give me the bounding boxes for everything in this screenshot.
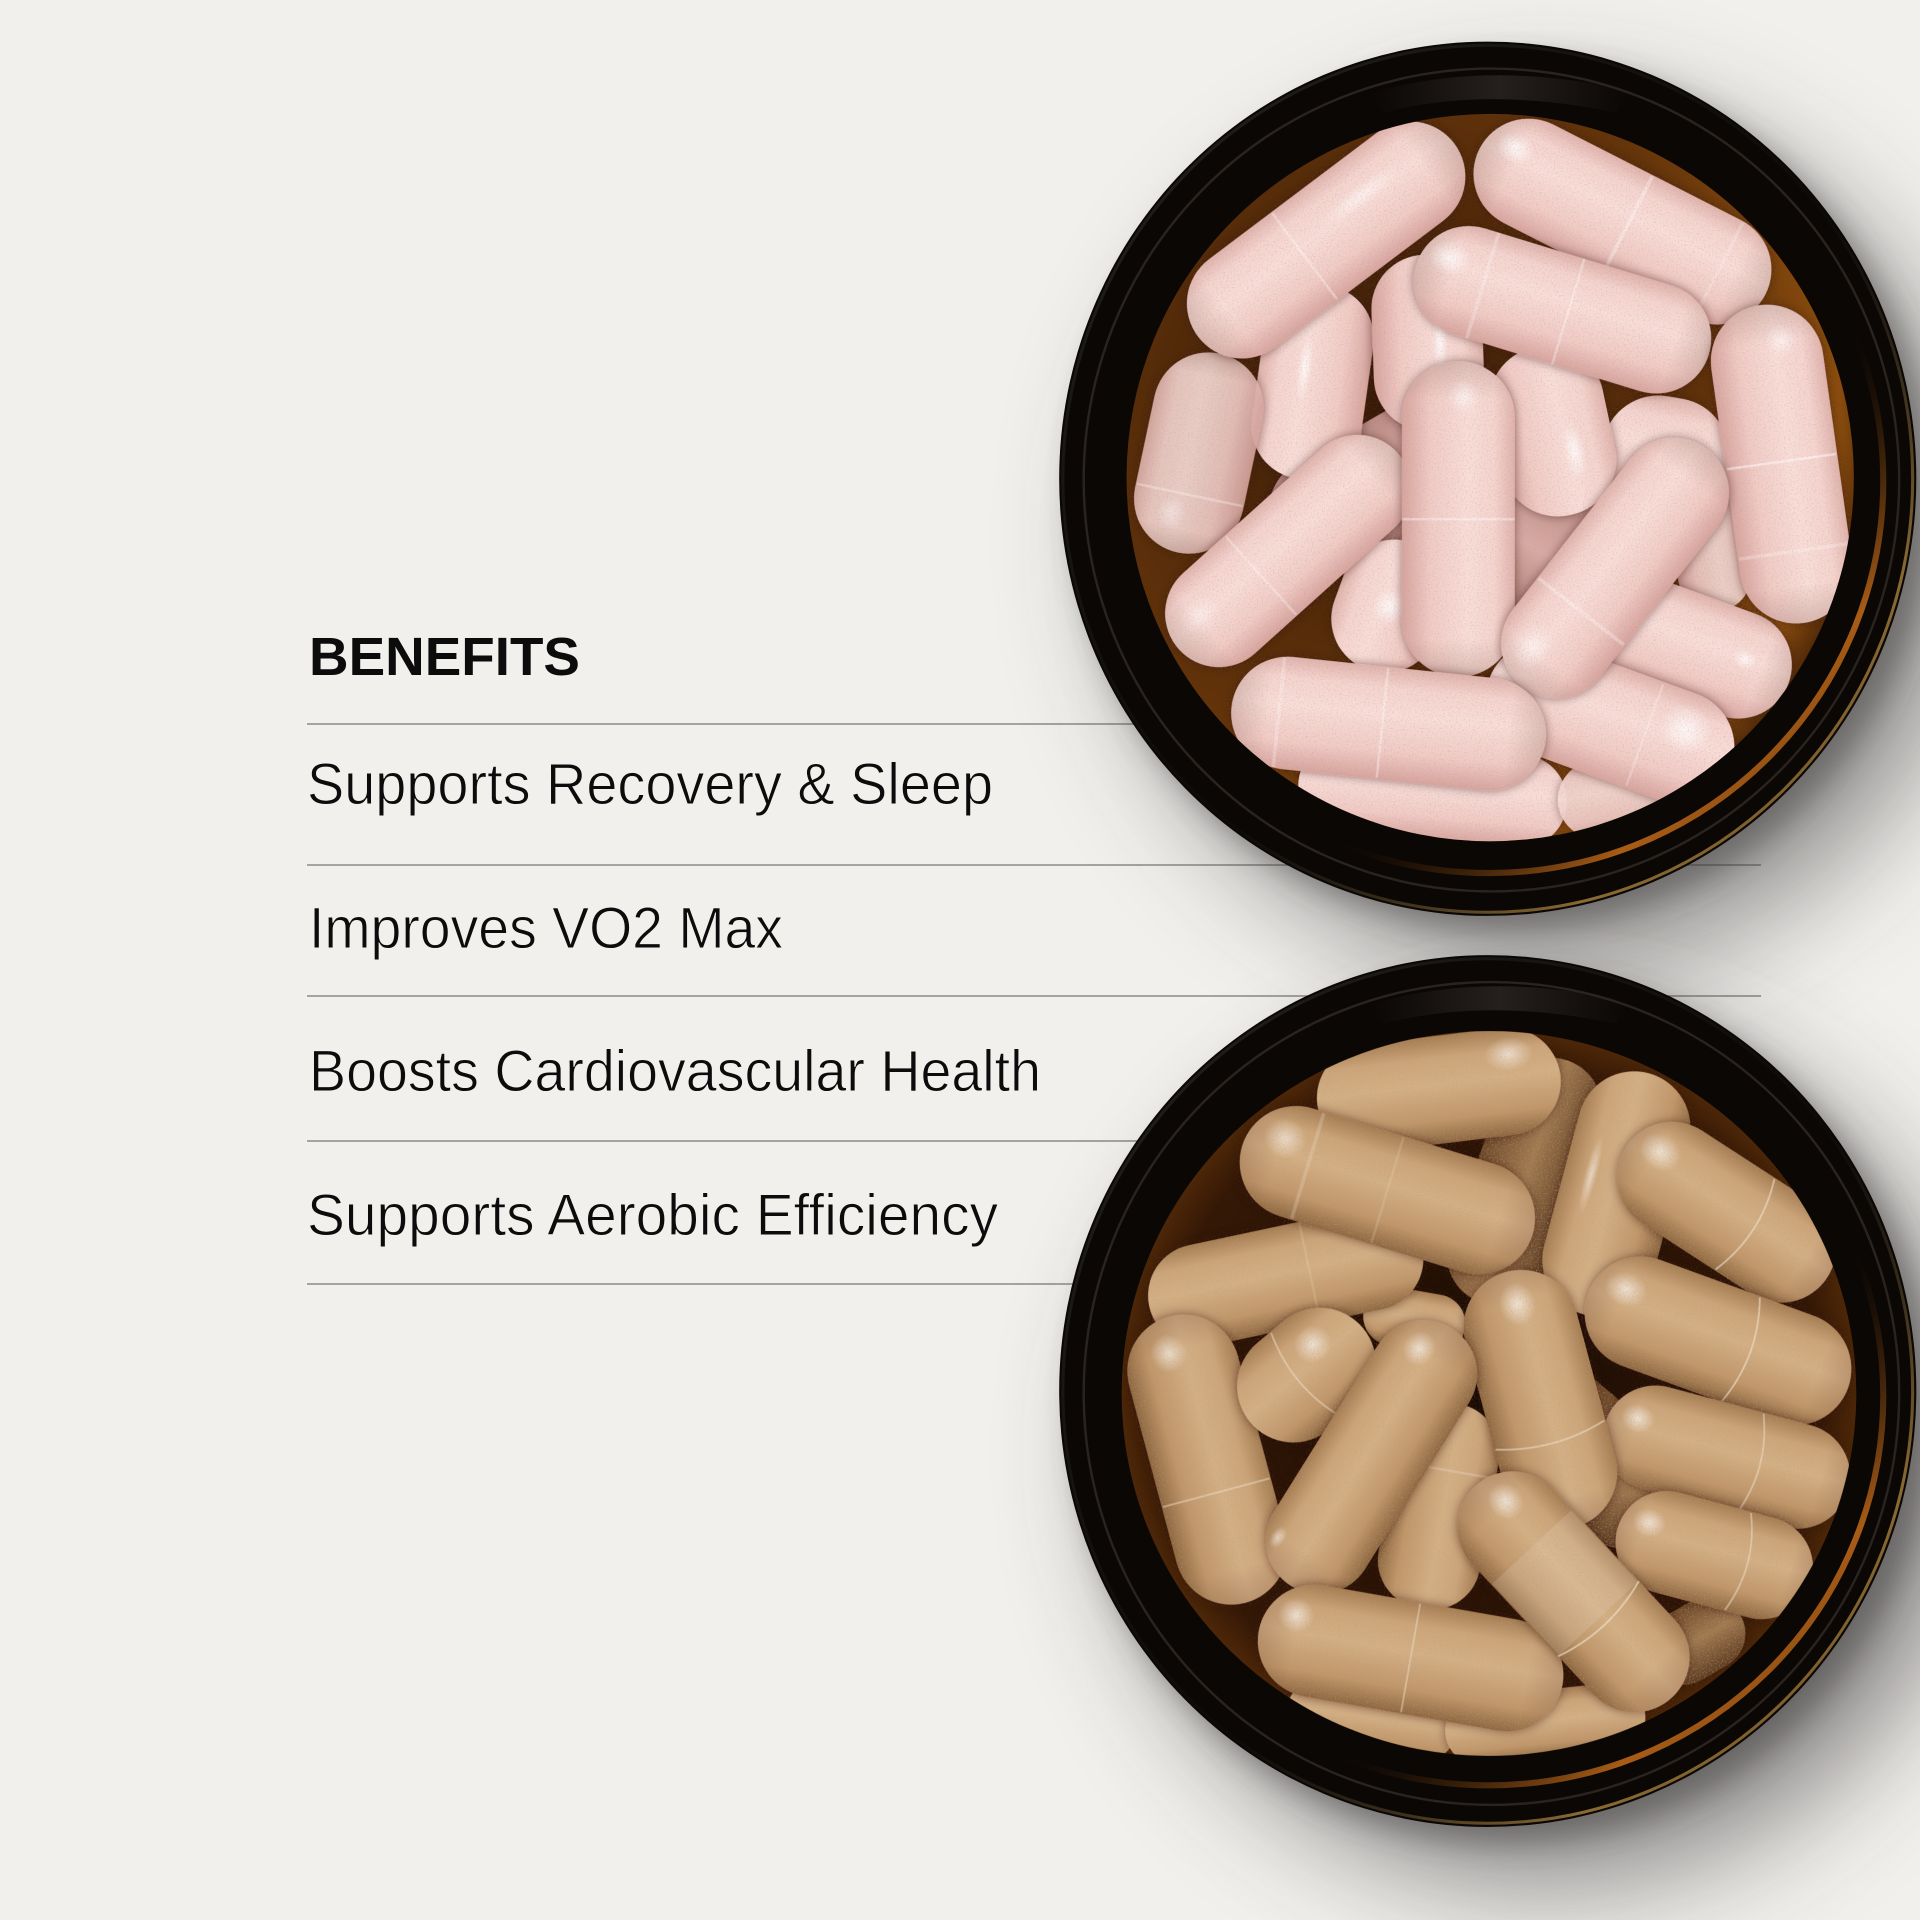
- jar shadows: [1075, 60, 1920, 1883]
- jar rim: [1059, 955, 1916, 1827]
- jars layer: [1059, 42, 1920, 1883]
- jar: tan capsules: [1059, 955, 1916, 1827]
- jar interior: [1122, 1031, 1856, 1756]
- jar rim: [1059, 42, 1916, 916]
- benefit: VO2 max: Improves VO2 Max: [309, 896, 783, 961]
- heading: benefits: BENEFITS: [309, 627, 580, 687]
- jar: pink capsules: [1059, 42, 1916, 916]
- pink capsules: [1124, 99, 1860, 852]
- benefit: aerobic efficiency: Supports Aerobic Efficiency: [307, 1183, 998, 1248]
- tan capsules: [1115, 1021, 1867, 1769]
- benefit: recovery and sleep: Supports Recovery & Sleep: [307, 752, 993, 817]
- divider lines: [307, 724, 1761, 1284]
- benefit: cardiovascular health: Boosts Cardiovascular Health: [309, 1039, 1041, 1104]
- jar interior: [1127, 114, 1854, 841]
